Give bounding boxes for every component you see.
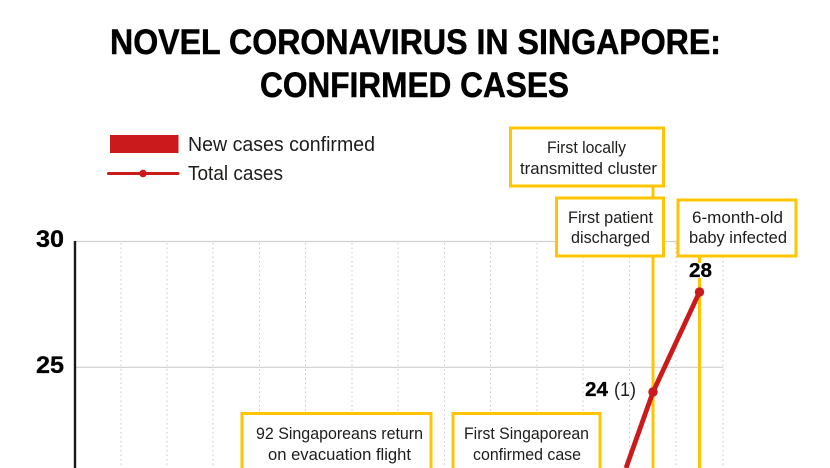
callout: first Singaporean confirmed case: First Singaporean bbox=[464, 425, 589, 443]
legend item: new cases confirmed: New cases confirmed bbox=[188, 133, 375, 156]
callout: first locally transmitted cluster: transmitted cluster bbox=[520, 160, 658, 178]
legend item: total cases: Total cases bbox=[188, 162, 283, 185]
data label: 28: 28 bbox=[689, 260, 712, 282]
data label: 24 (1): 24 bbox=[585, 379, 609, 401]
callout: 6-month-old baby infected bbox=[678, 200, 796, 256]
data label: 24 (1) bbox=[585, 379, 636, 401]
total cases line bbox=[626, 287, 704, 468]
callout: first patient discharged bbox=[556, 198, 664, 256]
callout: 92 Singaporeans return on evacuation flight: 92 Singaporeans return bbox=[256, 425, 423, 443]
connector lines bbox=[653, 187, 700, 468]
title bbox=[110, 23, 721, 105]
y axis bbox=[36, 226, 75, 468]
legend item: new cases confirmed bbox=[110, 133, 375, 156]
title: CONFIRMED CASES bbox=[260, 66, 569, 105]
callout: first locally transmitted cluster bbox=[510, 128, 664, 186]
callout: first Singaporean confirmed case bbox=[453, 414, 600, 468]
legend bbox=[108, 133, 375, 185]
callout: first patient discharged: First patient bbox=[568, 209, 653, 227]
callout: 6-month-old baby infected: 6-month-old bbox=[692, 209, 783, 227]
callout: 92 Singaporeans return on evacuation flight: on evacuation flight bbox=[268, 446, 411, 464]
callout: first locally transmitted cluster: First locally bbox=[547, 139, 627, 157]
y axis: 25 bbox=[36, 352, 64, 379]
y axis: 30 bbox=[36, 226, 64, 253]
legend item: total cases bbox=[108, 162, 283, 185]
line chart bbox=[36, 187, 723, 468]
callout: first Singaporean confirmed case: confirmed case bbox=[473, 446, 581, 464]
callout: 92 Singaporeans return on evacuation flight bbox=[242, 414, 431, 468]
callout: first patient discharged: discharged bbox=[571, 229, 650, 247]
data label: 24 (1): (1) bbox=[614, 380, 636, 401]
title: NOVEL CORONAVIRUS IN SINGAPORE: bbox=[110, 23, 721, 62]
callout: 6-month-old baby infected: baby infected bbox=[689, 229, 787, 247]
